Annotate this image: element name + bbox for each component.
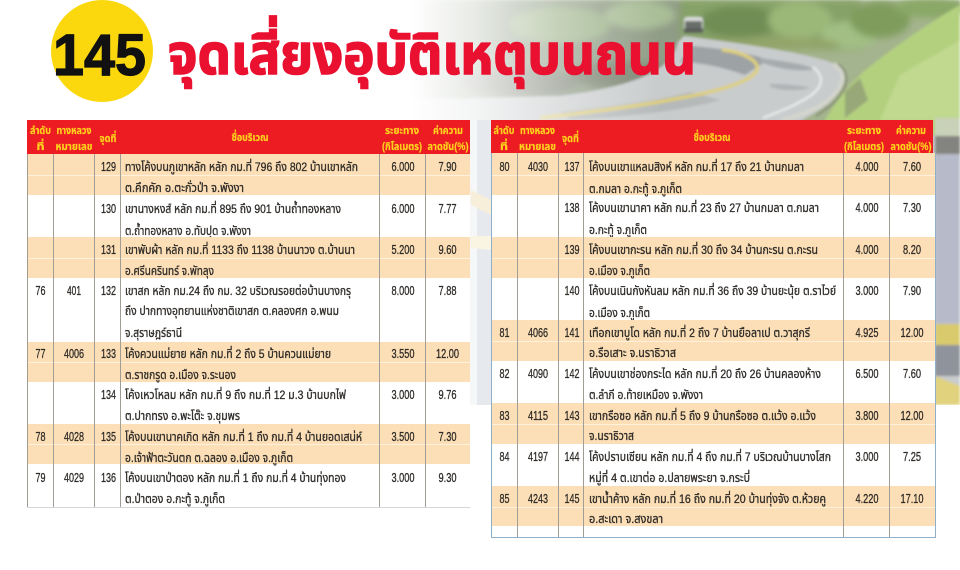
row 144: หมู่ที่ 4 ต.เขาต่อ อ.ปลายพระยา จ.กระบี่ bbox=[589, 469, 750, 485]
row 145: 17.10 bbox=[900, 491, 924, 506]
row 141: 12.00 bbox=[900, 325, 924, 340]
row 129: ทางโค้งบนภูเขาหลัก หลัก กม.ที่ 796 ถึง 802 บ้านเขาหลัก bbox=[125, 158, 358, 174]
row 134: โค้งเหวโหลม หลัก กม.ที่ 9 ถึง กม.ที่ 12 ม.3 บ้านบกไฟ bbox=[125, 386, 346, 402]
row 143: 3.800 bbox=[856, 408, 878, 423]
left table header bbox=[27, 120, 470, 154]
row 141: เทือกเขาบูโด หลัก กม.ที่ 2 ถึง 7 บ้านยือลาเป ต.วาสุกรี bbox=[589, 324, 810, 340]
right table header: จุดที่ bbox=[562, 130, 579, 145]
row 129: ต.คึกคัก อ.ตะกั่วป่า จ.พังงา bbox=[125, 180, 244, 195]
row 131: 131 bbox=[101, 242, 116, 257]
row 145 bbox=[491, 486, 935, 526]
row 138: อ.กะทู้ จ.ภูเก็ต bbox=[589, 223, 647, 237]
right table header: ทางหลวง bbox=[520, 125, 555, 137]
row 132 bbox=[36, 283, 456, 340]
row 137: โค้งบนเขาแหลมสิงห์ หลัก กม.ที่ 17 ถึง 21 บ้านกมลา bbox=[589, 158, 804, 174]
row 129: 7.90 bbox=[438, 159, 456, 174]
right table header: ระยะทาง bbox=[847, 125, 881, 137]
road edge line and curb bbox=[763, 67, 821, 118]
row 145: 85 bbox=[500, 491, 510, 506]
row 140: 140 bbox=[564, 283, 580, 298]
row 143: 143 bbox=[564, 408, 580, 423]
green slope bbox=[825, 5, 960, 135]
row 133: ต.ราชกรูด อ.เมือง จ.ระนอง bbox=[125, 368, 236, 382]
row 139: 139 bbox=[564, 242, 580, 257]
row 132: ถึง ปากทางอุทยานแห่งชาติเขาสก ต.คลองศก อ.พนม bbox=[125, 304, 339, 318]
row 136: 9.30 bbox=[438, 470, 456, 485]
row 142: 7.60 bbox=[903, 366, 921, 381]
row 144: 144 bbox=[564, 449, 580, 464]
row 141 bbox=[491, 320, 935, 361]
left table header: (กิโลเมตร) bbox=[382, 141, 422, 153]
row 145: 4243 bbox=[528, 491, 548, 506]
row 132: 7.88 bbox=[438, 283, 456, 298]
row 129: 6.000 bbox=[392, 159, 414, 174]
row 141: อ.รือเสาะ จ.นราธิวาส bbox=[589, 346, 676, 360]
row 144 bbox=[500, 448, 921, 485]
row 144: 4197 bbox=[528, 449, 548, 464]
row 130: เขานางหงส์ หลัก กม.ที่ 895 ถึง 901 บ้านถ้ำทองหลาง bbox=[125, 200, 341, 216]
right table header: ที่ bbox=[500, 138, 508, 153]
row 140: 3.000 bbox=[856, 283, 878, 298]
right table header: ค่าความ bbox=[896, 124, 926, 137]
row 140 bbox=[564, 282, 921, 320]
row 144: 84 bbox=[500, 449, 510, 464]
row 144: 7.25 bbox=[903, 449, 921, 464]
row 132: 401 bbox=[67, 283, 81, 298]
row 131: 5.200 bbox=[392, 242, 414, 257]
right table header: ชื่อบริเวณ bbox=[694, 129, 730, 144]
row 131: อ.ศรีนครินทร์ จ.พัทลุง bbox=[125, 264, 214, 278]
row 134: 9.76 bbox=[438, 387, 456, 402]
row 144: โค้งปราบเซียน หลัก กม.ที่ 4 ถึง กม.ที่ 7 บริเวณบ้านบางโสก bbox=[589, 448, 831, 464]
row 141: 4.925 bbox=[856, 325, 878, 340]
row 136: 136 bbox=[101, 470, 116, 485]
row 133 bbox=[27, 342, 470, 382]
row 143: เขากรือซอ หลัก กม.ที่ 5 ถึง 9 บ้านกรือซอ ต.แว้ง อ.แว้ง bbox=[589, 407, 816, 423]
row 140: อ.เมือง จ.ภูเก็ต bbox=[589, 306, 650, 320]
left table header: ทางหลวง bbox=[56, 125, 92, 137]
left table header: ชื่อบริเวณ bbox=[232, 129, 268, 144]
row 141: 81 bbox=[500, 325, 510, 340]
row 134: ต.ปากทรง อ.พะโต๊ะ จ.ชุมพร bbox=[125, 409, 240, 423]
left table header: ค่าความ bbox=[433, 124, 463, 137]
badge: number 145 in yellow circle: 145 bbox=[53, 23, 146, 88]
row 133: 4006 bbox=[64, 346, 84, 361]
row 129 bbox=[27, 154, 470, 195]
row 136: ต.ป่าตอง อ.กะทู้ จ.ภูเก็ต bbox=[125, 492, 225, 506]
left table header: ลาดชัน(%) bbox=[428, 141, 469, 153]
right table header: ลาดชัน(%) bbox=[890, 141, 932, 153]
row 145: อ.สะเดา จ.สงขลา bbox=[589, 512, 663, 526]
row 135: 78 bbox=[36, 429, 46, 444]
row 144: 3.000 bbox=[856, 449, 878, 464]
left table header: ระยะทาง bbox=[385, 125, 419, 137]
gap between tables bbox=[471, 120, 491, 405]
left table header: ที่ bbox=[36, 138, 44, 153]
row 137: ต.กมลา อ.กะทู้ จ.ภูเก็ต bbox=[589, 182, 682, 196]
row 138: โค้งบนเขานาคา หลัก กม.ที่ 23 ถึง 27 บ้านกมลา ต.กมลา bbox=[589, 199, 819, 215]
row 132: จ.สุราษฎร์ธานี bbox=[125, 326, 182, 340]
row 145: เขาน้ำค้าง หลัก กม.ที่ 16 ถึง กม.ที่ 20 บ้านทุ่งจัง ต.ห้วยคู bbox=[589, 490, 826, 506]
row 130: 130 bbox=[101, 201, 116, 216]
row 136: 3.000 bbox=[392, 470, 414, 485]
row 135: 3.500 bbox=[392, 429, 414, 444]
right table header: หมายเลข bbox=[519, 141, 556, 153]
row 131: เขาพับผ้า หลัก กม.ที่ 1133 ถึง 1138 บ้านนาวง ต.บ้านนา bbox=[125, 241, 355, 257]
row 143 bbox=[491, 403, 935, 444]
right table header: (กิโลเมตร) bbox=[844, 141, 884, 153]
row 143: จ.นราธิวาส bbox=[589, 429, 634, 443]
right table header: ลำดับ bbox=[494, 125, 515, 137]
row 130 bbox=[101, 200, 456, 238]
row 143: 4115 bbox=[528, 408, 548, 423]
right edge: road detail bbox=[935, 118, 960, 136]
right table header bbox=[491, 120, 933, 153]
row 135: 4028 bbox=[64, 429, 84, 444]
row 133: 133 bbox=[101, 346, 116, 361]
row 135: อ.เจ้าฟ้าตะวันตก ต.ฉลอง อ.เมือง จ.ภูเก็ต bbox=[125, 451, 293, 465]
row 142: 142 bbox=[564, 366, 580, 381]
row 133: โค้งควนแม่ยาย หลัก กม.ที่ 2 ถึง 5 บ้านควนแม่ยาย bbox=[125, 345, 331, 361]
road surface bbox=[410, 36, 960, 405]
row 145: 145 bbox=[564, 491, 580, 506]
row 132: 132 bbox=[101, 283, 116, 298]
row 135: 7.30 bbox=[438, 429, 456, 444]
row 133: 77 bbox=[36, 346, 46, 361]
left table bbox=[27, 120, 470, 508]
row 143: 83 bbox=[500, 408, 510, 423]
right table bbox=[491, 120, 936, 538]
row 139: 4.000 bbox=[856, 242, 878, 257]
row 142: โค้งบนเขาช่องกระได หลัก กม.ที่ 20 ถึง 26 บ้านคลองห้าง bbox=[589, 365, 821, 381]
row 130: 7.77 bbox=[438, 201, 456, 216]
row 137: 4030 bbox=[528, 159, 548, 174]
row 142: 4090 bbox=[528, 366, 548, 381]
left table header: จุดที่ bbox=[100, 130, 116, 145]
row 130: 6.000 bbox=[392, 201, 414, 216]
row 145: 4.220 bbox=[856, 491, 878, 506]
row 137: 7.60 bbox=[903, 159, 921, 174]
row 136 bbox=[36, 469, 456, 506]
row 131 bbox=[27, 237, 470, 278]
row 132: 8.000 bbox=[392, 283, 414, 298]
row 140: 7.90 bbox=[903, 283, 921, 298]
row 136: 4029 bbox=[64, 470, 84, 485]
row 137: 80 bbox=[500, 159, 510, 174]
row 133: 12.00 bbox=[436, 346, 459, 361]
row 142: ต.ลำภี อ.ท้ายเหมือง จ.พังงา bbox=[589, 388, 703, 402]
row 142: 82 bbox=[500, 366, 510, 381]
row 135: โค้งบนเขานาคเกิด หลัก กม.ที่ 1 ถึง กม.ที่ 4 บ้านยอดเสน่ห์ bbox=[125, 428, 362, 444]
row 137: 137 bbox=[564, 159, 580, 174]
row 138 bbox=[564, 199, 921, 237]
row 142 bbox=[500, 365, 921, 402]
row 137 bbox=[491, 153, 935, 196]
left table header: ลำดับ bbox=[30, 125, 51, 137]
row 138: 7.30 bbox=[903, 200, 921, 215]
row 135 bbox=[27, 424, 470, 465]
row 133: 3.550 bbox=[392, 346, 414, 361]
row 139: 8.20 bbox=[903, 242, 921, 257]
row 136: 79 bbox=[36, 470, 46, 485]
row 136: โค้งบนเขาป่าตอง หลัก กม.ที่ 1 ถึง กม.ที่ 4 บ้านทุ่งทอง bbox=[125, 469, 346, 485]
row 139: อ.เมือง จ.ภูเก็ต bbox=[589, 264, 650, 278]
row 143: 12.00 bbox=[900, 408, 924, 423]
row 139 bbox=[491, 237, 935, 278]
row 137: 4.000 bbox=[856, 159, 878, 174]
left table header: หมายเลข bbox=[56, 141, 92, 153]
row 140: โค้งบนเนินกังหันลม หลัก กม.ที่ 36 ถึง 39 บ้านยะนุ้ย ต.ราไวย์ bbox=[589, 282, 836, 298]
badge: number 145 in yellow circle bbox=[51, 0, 153, 102]
row 134: 134 bbox=[101, 387, 116, 402]
row 135: 135 bbox=[101, 429, 116, 444]
row 142: 6.500 bbox=[856, 366, 878, 381]
row 132: 76 bbox=[36, 283, 46, 298]
row 139: โค้งบนเขากะรน หลัก กม.ที่ 30 ถึง 34 บ้านกะรน ต.กะรน bbox=[589, 241, 818, 257]
background photo: curving mountain road bbox=[370, 0, 960, 570]
row 132: เขาสก หลัก กม.24 ถึง กม. 32 บริเวณรอยต่อบ้านบางกรุ bbox=[125, 284, 351, 298]
row 131: 9.60 bbox=[438, 242, 456, 257]
title: จุดเสี่ยงอุบัติเหตุบนถนน bbox=[168, 15, 696, 89]
row 141: 141 bbox=[564, 325, 580, 340]
row 129: 129 bbox=[101, 159, 116, 174]
row 134 bbox=[101, 386, 456, 423]
row 138: 138 bbox=[564, 200, 580, 215]
row 134: 3.000 bbox=[392, 387, 414, 402]
row 141: 4066 bbox=[528, 325, 548, 340]
car bbox=[684, 17, 703, 33]
row 138: 4.000 bbox=[856, 200, 878, 215]
yellow center line bbox=[540, 50, 757, 118]
row 130: ต.ถ้ำทองหลาง อ.ทับปุด จ.พังงา bbox=[125, 222, 251, 238]
